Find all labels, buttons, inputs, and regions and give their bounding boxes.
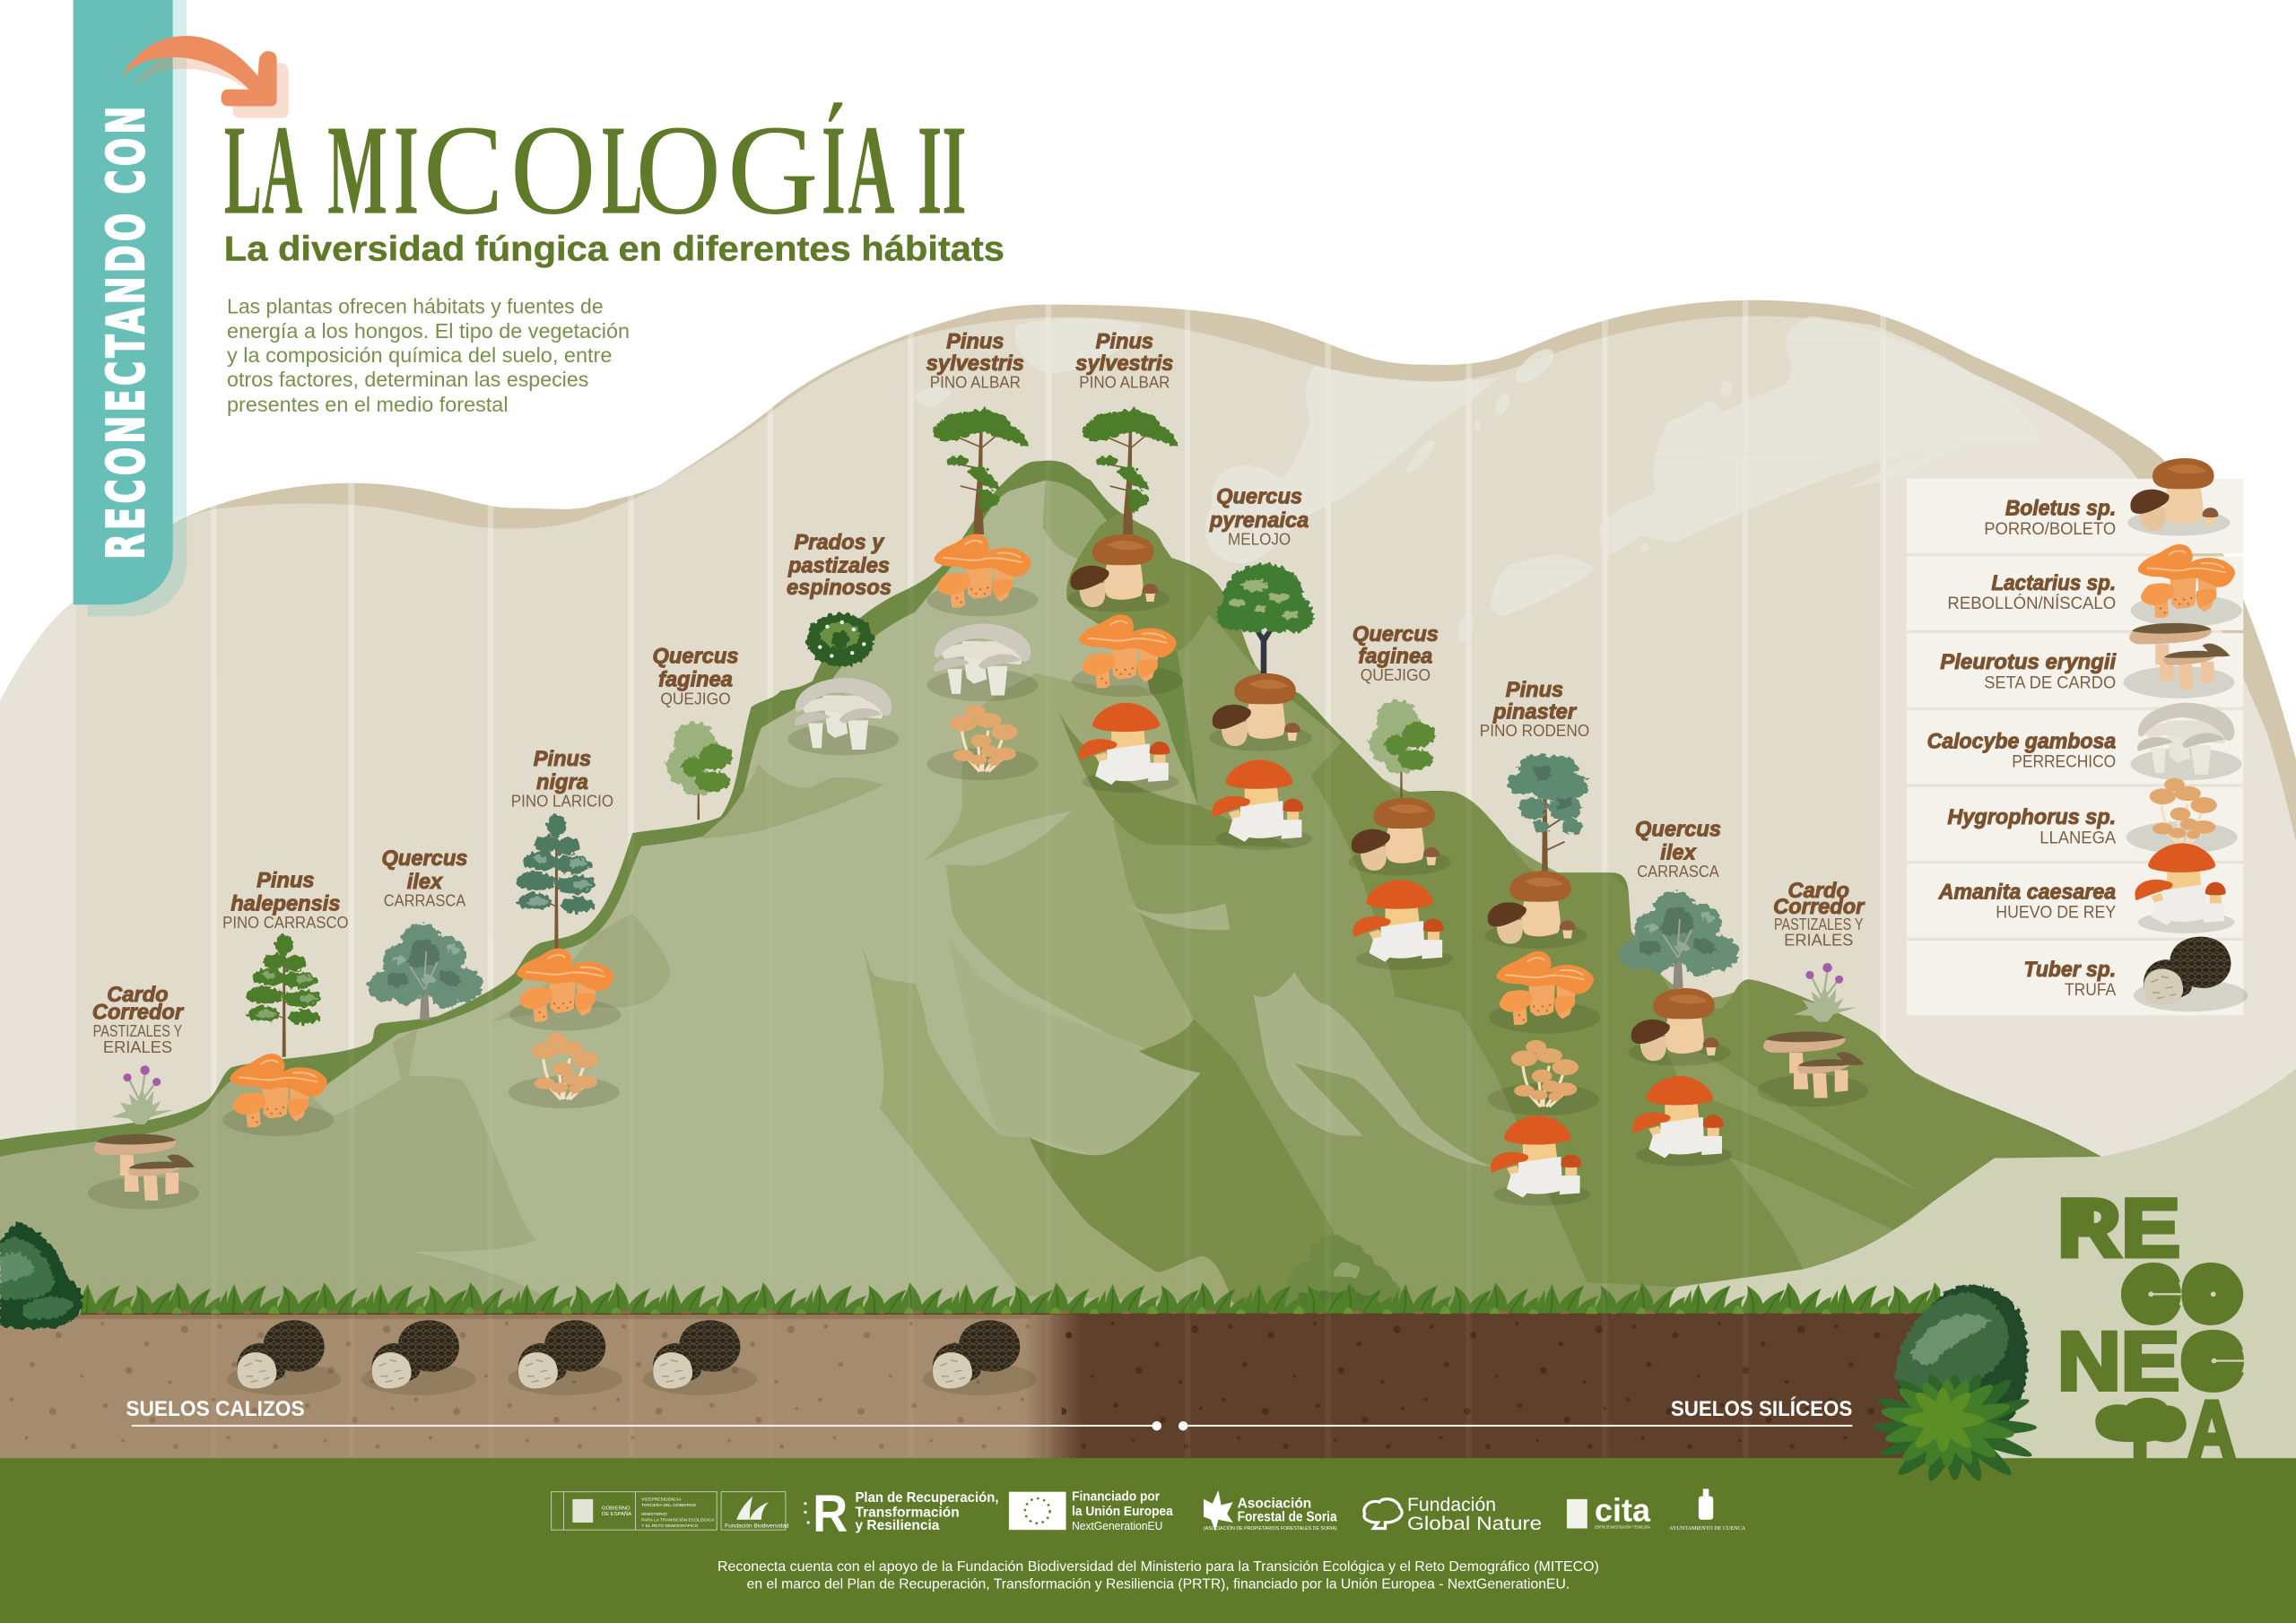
soil labels and axis: SUELOS SILÍCEOS (1671, 1396, 1852, 1421)
reconecta logo: NEC (2057, 1315, 2243, 1407)
label: Quercus faginea 2: faginea (1359, 646, 1432, 669)
legend row: Boletus (1907, 479, 2243, 553)
label: Cardo Corredor left: ERIALES (103, 1037, 172, 1056)
intro text (227, 294, 630, 416)
logo: Fundación Biodiversidad: Fundación Biodiversidad (725, 1523, 789, 1530)
grass strip (81, 1281, 1940, 1314)
logo: Plan de Recuperación: Transformación (855, 1505, 960, 1520)
legend row: Calocybe: Calocybe gambosa (1927, 730, 2116, 753)
mushroom: lactarius nigra (509, 949, 621, 1030)
intro text: energía a los hongos. El tipo de vegetación (227, 319, 630, 343)
logo: EU flag: NextGenerationEU (1072, 1519, 1162, 1532)
intro text: presentes en el medio forestal (227, 393, 509, 416)
label: Quercus pyrenaica (1209, 486, 1309, 548)
label: Quercus pyrenaica: MELOJO (1228, 529, 1291, 548)
label: Quercus ilex 2 (1635, 818, 1721, 881)
logo: Fundacion Global Nature: Global Nature (1407, 1514, 1542, 1534)
infographic: II (918, 100, 967, 242)
logo: Gobierno de España: Y EL RETO DEMOGRÁFICO (641, 1523, 699, 1529)
mushroom: hygrophorus sylvestris (926, 705, 1039, 780)
label: Pinus sylvestris 2: Pinus (1096, 331, 1153, 354)
label: Quercus faginea: Quercus (653, 646, 739, 669)
logo: EU flag: Financiado por (1072, 1489, 1160, 1504)
label: Pinus halepensis: Pinus (257, 869, 315, 892)
icon: left bush (0, 1222, 83, 1329)
legend row: Pleurotus (1907, 633, 2243, 707)
icon: oak ilex (369, 924, 483, 1020)
title: M (327, 100, 387, 242)
mountain (0, 461, 2101, 1317)
legend mushroom: lactarius (2131, 544, 2242, 627)
logo: Plan de Recuperación: y Resiliencia (855, 1518, 940, 1533)
legend row: Pleurotus: Pleurotus eryngii (1940, 651, 2117, 674)
logo: Gobierno de España: GOBIERNO (602, 1506, 631, 1511)
label: Pinus nigra: PINO LARICIO (511, 792, 613, 811)
label: Quercus ilex: Quercus (381, 847, 467, 871)
label: Quercus ilex 2: ilex (1660, 841, 1697, 864)
logo: EU flag (1009, 1489, 1174, 1532)
label: Pinus sylvestris 2: sylvestris (1075, 352, 1173, 376)
label: Quercus faginea: QUEJIGO (660, 689, 731, 707)
logo: Gobierno de España: DE ESPAÑA (602, 1511, 631, 1517)
title: A (848, 100, 895, 242)
teal banner (74, 0, 187, 616)
mushroom: amanita sylvestris (1079, 703, 1178, 793)
mushroom: calocybe sylvestris (926, 624, 1039, 701)
logo: cita: cita (1595, 1491, 1651, 1528)
legend row: Hygrophorus: Hygrophorus sp. (1947, 806, 2116, 829)
logo: Gobierno de España: PARA LA TRANSICIÓN ECOLÓGICA (641, 1516, 715, 1523)
legend mushroom: boletus (2127, 458, 2231, 536)
label: Quercus faginea (653, 646, 739, 707)
footer credit text (718, 1559, 1599, 1592)
label: Quercus faginea 2: Quercus (1352, 623, 1439, 647)
label: Pinus sylvestris 1: PINO ALBAR (930, 373, 1021, 392)
vertical stripes (211, 463, 1748, 1458)
legend mushroom: hygrophorus (2126, 778, 2238, 854)
legend row: Tuber: Tuber sp. (2023, 959, 2116, 982)
logo: Plan de Recuperación (804, 1485, 998, 1543)
label: Pinus sylvestris 2: PINO ALBAR (1079, 373, 1170, 392)
title: I (394, 100, 419, 242)
label: Cardo Corredor left: Corredor (92, 1001, 185, 1024)
reconecta logo: A (2187, 1384, 2236, 1476)
background sky hill (0, 299, 2296, 1157)
footer band (0, 1458, 2296, 1623)
label: Quercus ilex: ilex (407, 871, 443, 894)
footer logos (552, 1485, 1746, 1543)
subtitle: La diversidad fúngica en diferentes hábitats (224, 230, 1004, 269)
logo: cita (1567, 1491, 1651, 1531)
legend row: Amanita: HUEVO DE REY (1996, 903, 2116, 923)
label: Quercus ilex 2: Quercus (1635, 818, 1721, 841)
icon: oak pyrenaica (1217, 564, 1313, 673)
logo: Plan de Recuperación: Plan de Recuperación, (855, 1490, 998, 1506)
label: Cardo Corredor right: Cardo (1788, 880, 1849, 903)
legend mushroom: tuber (2134, 937, 2248, 1011)
label: Prados y pastizales (787, 531, 891, 600)
title: O (636, 100, 721, 242)
mushroom: boletus ilex (1629, 988, 1731, 1066)
title: L (602, 100, 643, 242)
truffles in soil (227, 1320, 1037, 1395)
label: Pinus sylvestris 1: Pinus (946, 331, 1004, 354)
intro text: y la composición química del suelo, entre (227, 343, 612, 367)
label: Quercus ilex: CARRASCA (384, 891, 466, 910)
soil ground (0, 1312, 1940, 1460)
icon: oak ilex 2 (1619, 891, 1739, 988)
legend row: Boletus: Boletus sp. (2005, 498, 2116, 521)
legend row: Tuber (1907, 941, 2243, 1015)
label: Prados y pastizales: Prados y (795, 531, 885, 554)
logo: Gobierno de España: TERCERA DEL GOBIERNO (641, 1503, 697, 1508)
title: C (423, 100, 504, 242)
label: Cardo Corredor right: Corredor (1773, 896, 1866, 919)
title: O (510, 100, 596, 242)
reconecta logo: CO (2123, 1248, 2242, 1340)
label: Cardo Corredor right: PASTIZALES Y (1774, 915, 1864, 933)
mushroom: amanita faginea (1353, 880, 1453, 970)
label: Pinus pinaster: Pinus (1506, 679, 1563, 702)
logo: EU flag: la Unión Europea (1072, 1505, 1174, 1519)
logo: Ayuntamiento de Cuenca (1669, 1488, 1746, 1532)
label: Cardo Corredor left (92, 984, 185, 1056)
intro text: Las plantas ofrecen hábitats y fuentes de (227, 294, 604, 317)
mushroom: boletus pyrenaica (1210, 673, 1312, 751)
icon: right bush (1873, 1285, 2037, 1485)
label: Quercus ilex (381, 847, 467, 910)
label: Prados y pastizales: espinosos (787, 577, 891, 600)
legend panel (1907, 479, 2243, 1015)
mushroom: boletus sylvestris (1067, 534, 1170, 612)
mushroom: lactarius sylvestris 2 (1072, 614, 1183, 697)
intro text: otros factores, determinan las especies (227, 368, 588, 391)
legend mushroom: calocybe (2131, 703, 2242, 780)
mushroom: hygrophorus nigra (509, 1033, 620, 1108)
soil labels and axis (126, 1396, 1852, 1430)
label: Prados y pastizales: pastizales (787, 554, 890, 577)
label: Quercus faginea: faginea (658, 669, 733, 692)
mushroom: calocybe prados (787, 678, 899, 755)
legend row: Amanita: Amanita caesarea (1938, 881, 2116, 904)
legend row: Amanita (1907, 864, 2243, 938)
label: Pinus sylvestris 2 (1075, 331, 1173, 392)
title: G (727, 100, 819, 242)
title: Í (822, 100, 846, 242)
label: Pinus pinaster (1480, 679, 1589, 740)
label: Cardo Corredor left: PASTIZALES Y (93, 1021, 182, 1040)
reconecta logo (2057, 1183, 2246, 1476)
mushroom: pleurotus right (1757, 1031, 1868, 1107)
label: Pinus pinaster: pinaster (1492, 701, 1578, 725)
footer credit text: en el marco del Plan de Recuperación, Transformación y Resiliencia (PRTR), financiado por la Unión Europea - NextGenerationEU. (747, 1576, 1570, 1592)
icon: pine halepensis (247, 934, 321, 1057)
label: Pinus pinaster: PINO RODENO (1480, 721, 1589, 740)
icon: thistle left (111, 1065, 174, 1124)
mushroom: amanita pinaster (1491, 1115, 1590, 1206)
label: Cardo Corredor left: Cardo (107, 984, 169, 1007)
label: Quercus pyrenaica: pyrenaica (1209, 509, 1309, 533)
logo: Asociacion Forestal de Soria: Forestal de Soria (1238, 1509, 1337, 1524)
label: Cardo Corredor right: ERIALES (1784, 931, 1853, 950)
label: Quercus faginea 2 (1352, 623, 1439, 684)
label: Cardo Corredor right (1773, 880, 1866, 950)
mushroom: boletus faginea (1349, 798, 1451, 875)
mushroom: hygrophorus pinaster (1488, 1040, 1599, 1115)
mushroom: boletus pinaster (1485, 871, 1587, 949)
logo: Asociacion Forestal de Soria: Asociación (1238, 1497, 1311, 1512)
legend row: Calocybe (1907, 710, 2243, 784)
label: Pinus halepensis (222, 869, 349, 932)
icon: thorn bush (807, 613, 874, 666)
label: Pinus nigra: Pinus (534, 748, 591, 771)
label: Quercus faginea 2: QUEJIGO (1361, 665, 1431, 684)
logo: Gobierno de España (552, 1492, 717, 1530)
legend mushroom: pleurotus (2123, 623, 2234, 699)
logo: Asociacion Forestal de Soria (1204, 1490, 1337, 1532)
pale green right hill (1465, 1069, 2296, 1464)
mushroom: pleurotus left (88, 1134, 199, 1210)
icon: orange arrow (122, 36, 289, 117)
icon: oak faginea 2 (1370, 700, 1435, 798)
logo: Gobierno de España: VICEPRESIDENCIA (641, 1497, 682, 1502)
logo: cita: CENTRO DE INVESTIGACIÓN Y TECNOLOGÍA (1595, 1524, 1650, 1531)
legend row: Lactarius (1907, 556, 2243, 630)
center bush (1287, 1236, 1400, 1310)
footer credit text: Reconecta cuenta con el apoyo de la Fundación Biodiversidad del Ministerio para la Transición Ecológica y el Reto Demográfico (MITECO) (718, 1559, 1599, 1575)
legend row: Tuber: TRUFA (2065, 980, 2117, 1000)
mushroom: lactarius halepensis (222, 1054, 334, 1136)
label: Pinus halepensis: PINO CARRASCO (222, 913, 349, 932)
legend mushroom: amanita (2135, 843, 2234, 933)
title: LA (224, 100, 302, 242)
label: Pinus sylvestris 1: sylvestris (926, 352, 1024, 376)
logo: Gobierno de España: MINISTERIO (641, 1512, 667, 1517)
label: Pinus sylvestris 1 (926, 331, 1024, 392)
label: Pinus halepensis: halepensis (230, 893, 341, 916)
logo: Asociacion Forestal de Soria: (ASOCIACIÓN DE PROPIETARIOS FORESTALES DE SORIA) (1204, 1525, 1337, 1532)
legend row: Hygrophorus (1907, 787, 2243, 861)
logo: Fundación Biodiversidad (721, 1492, 789, 1530)
icon: thistle right (1794, 963, 1857, 1022)
icon: pine pinaster (1508, 754, 1588, 872)
label: Quercus pyrenaica: Quercus (1216, 486, 1302, 509)
logo: Fundacion Global Nature: Fundación (1407, 1495, 1496, 1515)
mushroom: lactarius pinaster (1489, 951, 1600, 1034)
logo: Plan de Recuperación: R (813, 1485, 848, 1543)
icon: pine sylvestris 2 (1083, 410, 1178, 534)
logo: Fundacion Global Nature (1364, 1495, 1542, 1534)
legend row: Calocybe: PERRECHICO (2012, 752, 2116, 772)
reconecta logo: RE (2057, 1183, 2180, 1274)
mushroom: amanita pyrenaica (1213, 759, 1312, 850)
legend row: Hygrophorus: LLANEGA (2039, 828, 2117, 847)
soil labels and axis: SUELOS CALIZOS (126, 1398, 305, 1421)
label: Pinus nigra: nigra (536, 771, 588, 794)
icon: pine sylvestris 1 (933, 410, 1030, 534)
mushroom: amanita ilex (1632, 1076, 1732, 1166)
icon: pine nigra (517, 814, 596, 949)
legend row: Boletus: PORRO/BOLETO (1984, 519, 2116, 539)
legend row: Lactarius: Lactarius sp. (1991, 572, 2116, 595)
logo: Ayuntamiento de Cuenca: AYUNTAMIENTO DE CUENCA (1669, 1525, 1746, 1532)
legend row: Lactarius: REBOLLÓN/NÍSCALO (1947, 593, 2116, 613)
mushroom: lactarius sylvestris (926, 534, 1039, 616)
legend row: Pleurotus: SETA DE CARDO (1984, 673, 2116, 692)
icon: oak faginea (666, 723, 732, 820)
label: Pinus nigra (511, 748, 613, 811)
label: Quercus ilex 2: CARRASCA (1637, 862, 1719, 881)
